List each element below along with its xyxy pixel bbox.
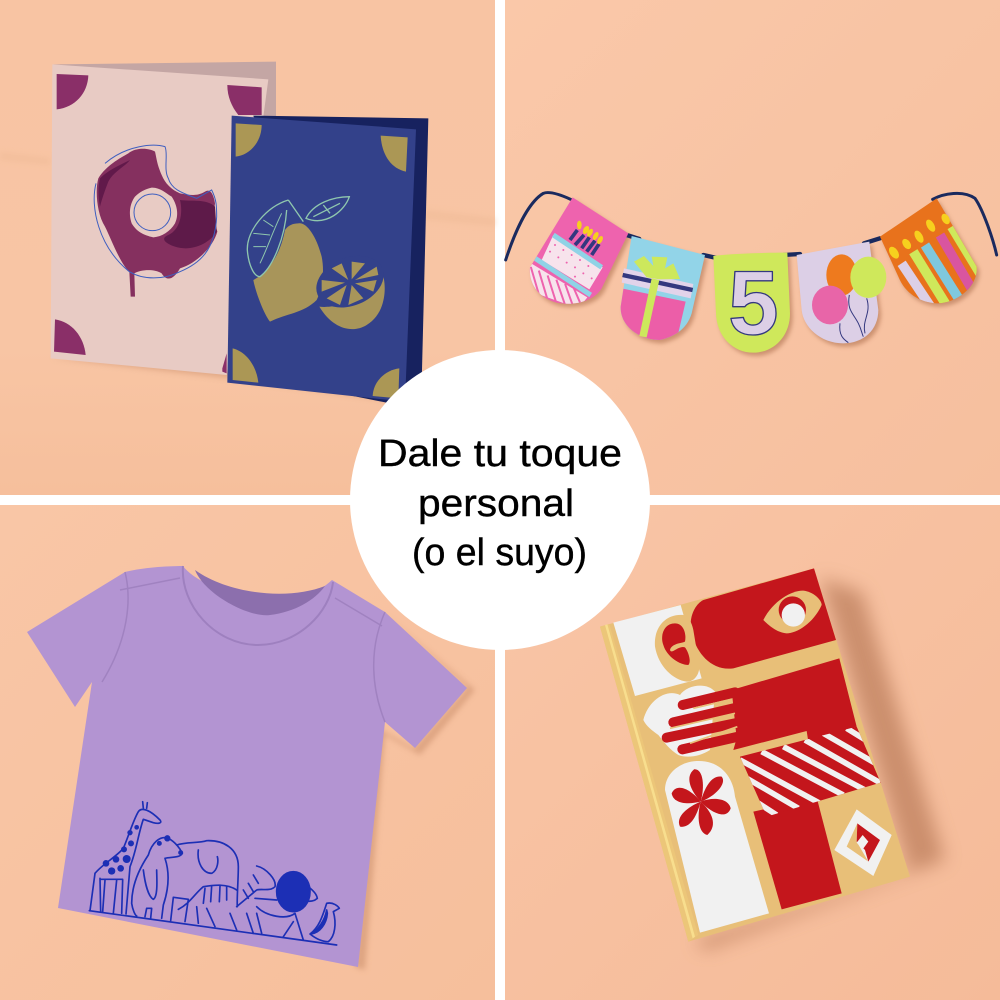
- heading text: personal: [418, 483, 574, 525]
- panel: t-shirt: [0, 505, 495, 1000]
- eye: [763, 591, 822, 633]
- icon: pear: [247, 197, 349, 322]
- icon: elephant: [171, 841, 238, 922]
- icon: giraffe: [90, 802, 161, 914]
- panel: notebook: [505, 505, 1000, 1000]
- diamond tile: [834, 809, 892, 876]
- shirt: [27, 566, 467, 967]
- red head: [691, 568, 836, 669]
- white panel: top left: [613, 605, 702, 696]
- icon: donut: [94, 145, 217, 297]
- flag: gift: [617, 236, 705, 340]
- card: blue lemon: [227, 116, 428, 403]
- heading text: Dale tu toque: [378, 433, 622, 475]
- panel: greeting cards: [0, 0, 495, 495]
- ear: [655, 615, 699, 682]
- icon: lemon half: [309, 246, 391, 329]
- lips: [643, 686, 715, 757]
- icon: lion: [255, 872, 317, 940]
- white arch with flower: [665, 761, 769, 933]
- flag: number 5: [713, 253, 790, 354]
- number five: 5: [728, 253, 779, 354]
- striped panel: [740, 727, 881, 817]
- heading text: (o el suyo): [412, 532, 587, 574]
- ribbon: [506, 193, 997, 260]
- animals illustration: [89, 802, 339, 945]
- icon: zebra: [178, 866, 275, 933]
- red block: [753, 797, 842, 909]
- card: pink donut: [51, 62, 276, 375]
- notebook: [600, 568, 910, 942]
- flag: cake: [527, 197, 628, 308]
- panel: birthday banner: [505, 0, 1000, 495]
- circle badge: [350, 350, 650, 650]
- hand: [667, 658, 857, 750]
- icon: bear: [132, 836, 182, 918]
- flag: candles: [880, 198, 977, 304]
- flag shadows: [533, 201, 979, 356]
- icon: penguin: [310, 903, 339, 942]
- heading text: [378, 433, 622, 574]
- flag: balloons: [797, 242, 886, 343]
